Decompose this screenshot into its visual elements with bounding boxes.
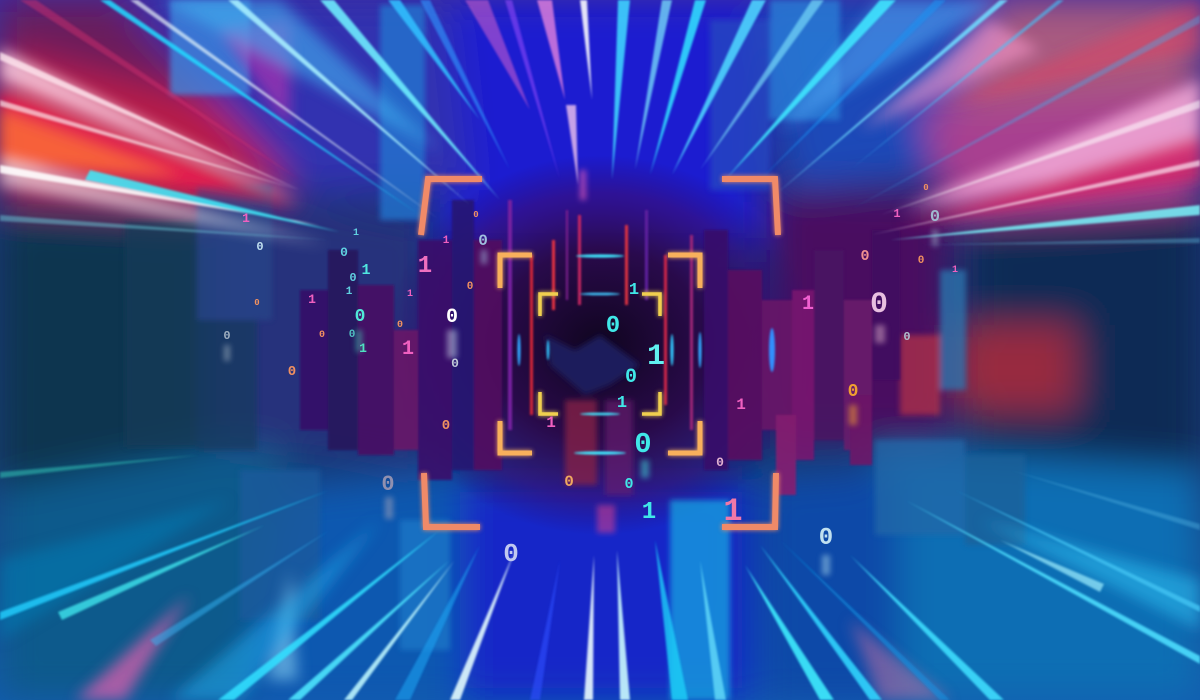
panel: centre vertical streaks	[508, 200, 693, 430]
binary digits: 1	[723, 493, 743, 530]
binary digits: 1	[353, 228, 359, 239]
binary digits: 0	[634, 428, 652, 461]
binary digits: 1	[407, 289, 413, 300]
binary digits: 0	[819, 525, 833, 552]
centre light flares	[517, 254, 775, 455]
binary digits: 0	[606, 313, 620, 340]
binary digits: 0	[467, 281, 473, 293]
binary digits: 0	[918, 255, 924, 267]
binary digits: 0	[564, 473, 574, 491]
binary digits: 0	[473, 210, 479, 220]
binary digits: 0	[478, 232, 488, 250]
binary digits: 0	[355, 307, 365, 327]
binary digits: 1	[242, 211, 250, 226]
panel: violet tunnel blocks, inner	[300, 200, 900, 495]
bracket: middle amber	[500, 255, 700, 453]
binary digits: 0	[381, 472, 395, 497]
binary digits: 1	[952, 265, 958, 276]
binary digits: 0	[340, 245, 348, 260]
binary digits: 0	[848, 382, 858, 402]
binary digits: 0	[903, 330, 911, 344]
binary digits: 1	[629, 281, 639, 300]
binary digits: 0	[860, 248, 870, 265]
binary digits: 1	[359, 341, 367, 356]
binary digits: 0	[319, 330, 325, 341]
binary digits: 0	[397, 320, 403, 331]
binary digits: 0	[870, 288, 888, 322]
binary digits: 0	[923, 183, 929, 193]
panel: blurred tunnel blocks, outer	[125, 0, 1025, 700]
binary digits: 1	[346, 286, 353, 298]
digit reflections	[224, 230, 938, 575]
binary digits: 0	[223, 329, 231, 343]
binary digits: 0	[503, 539, 519, 569]
binary digits: 0	[442, 418, 450, 434]
binary digits: 0	[254, 298, 260, 308]
binary digits: 0	[288, 364, 296, 380]
binary digits: 0	[451, 356, 459, 371]
binary digits: 0	[716, 455, 724, 470]
binary digits: 0	[930, 208, 940, 227]
binary digits: 0	[256, 240, 264, 254]
binary digits: 1	[361, 262, 371, 279]
binary digits: 0	[446, 306, 458, 329]
binary digits: 1	[802, 293, 814, 316]
binary digits: 1	[443, 235, 450, 247]
binary digits: 0	[624, 476, 634, 493]
binary digits: 1	[617, 394, 627, 413]
panel: centre dark shape and lower glow	[545, 170, 640, 533]
binary digits: 1	[642, 499, 656, 526]
bracket: outer orange	[421, 179, 778, 527]
binary digits: 1	[308, 292, 316, 307]
panel: centre dark core	[385, 155, 815, 535]
bracket: inner yellow	[540, 294, 660, 414]
binary digits: 1	[893, 207, 901, 221]
binary digits	[223, 183, 958, 569]
binary digits: 0	[349, 271, 357, 285]
binary digits: 1	[647, 340, 665, 374]
binary digits: 0	[349, 329, 355, 341]
binary digits: 1	[736, 396, 746, 414]
binary digits: 1	[546, 414, 556, 432]
binary digits: 0	[625, 366, 637, 389]
binary digits: 1	[402, 338, 414, 361]
binary digits: 1	[418, 253, 432, 280]
